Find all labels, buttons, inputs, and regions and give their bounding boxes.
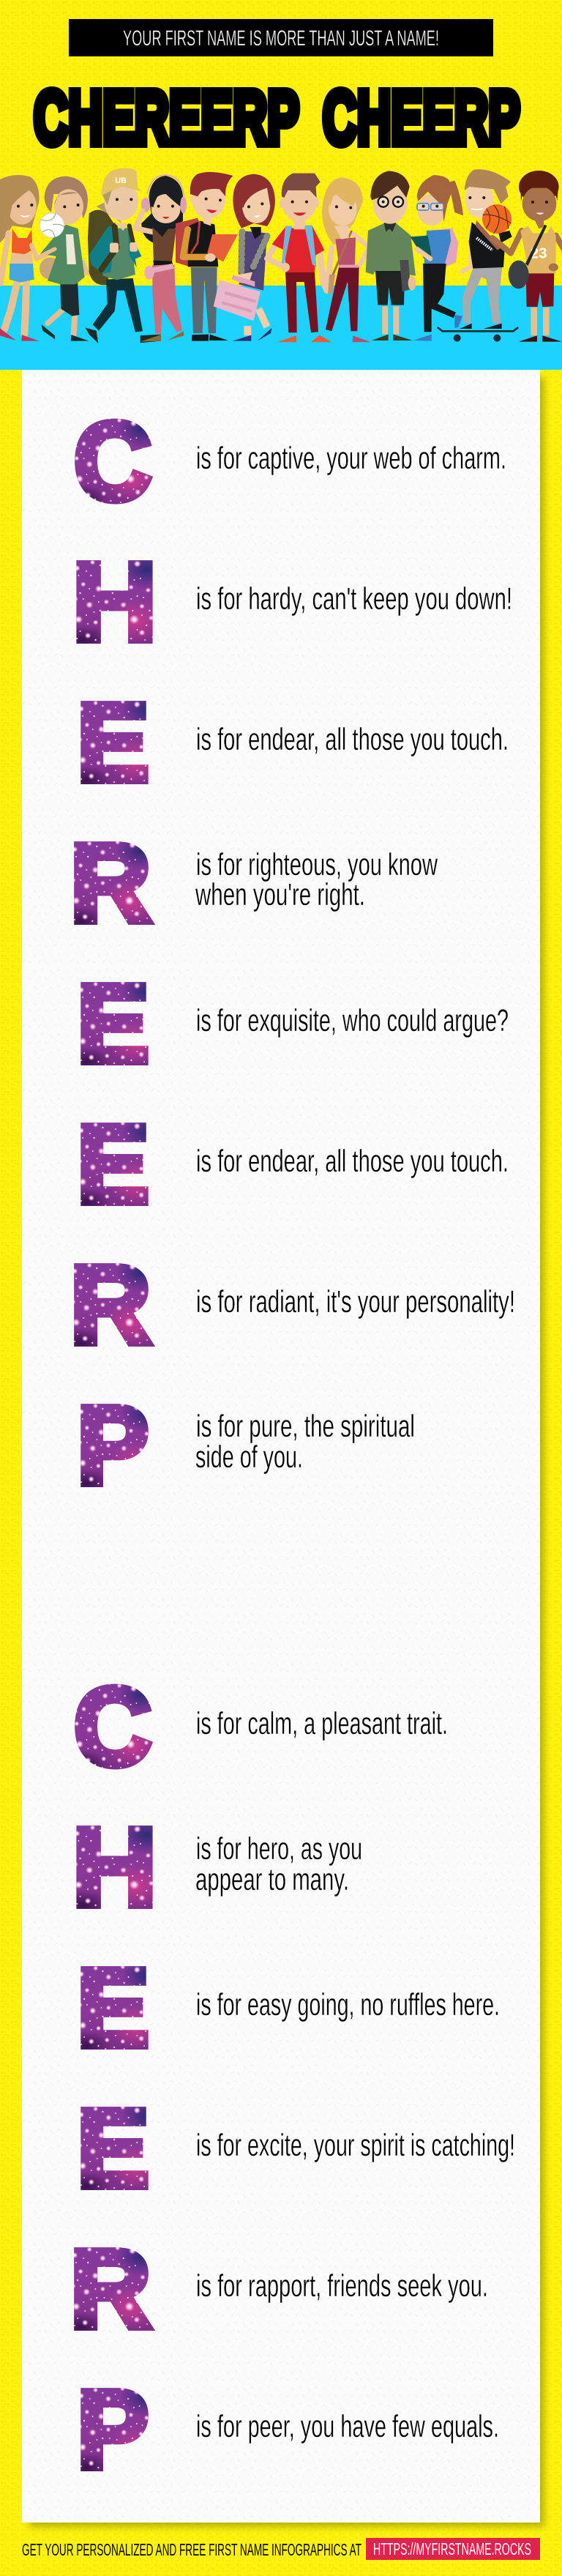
row: P pure — [77, 1383, 415, 1507]
row: E endear: E — [77, 680, 149, 804]
row: H hero — [72, 1806, 362, 1929]
row: E exquisite: E — [77, 961, 149, 1085]
row: R righteous: R — [70, 822, 151, 945]
row: R righteous: when you're right. — [195, 877, 365, 912]
row: H hero: H — [72, 1806, 157, 1929]
row: R radiant: R — [70, 1244, 151, 1367]
row: C calm: is for calm, a pleasant trait. — [196, 1706, 448, 1741]
row: C calm — [74, 1664, 448, 1788]
row: E excite: E — [77, 2086, 149, 2210]
person: boy in yellow jersey — [492, 171, 562, 342]
title — [34, 76, 520, 160]
row: P pure: is for pure, the spiritual — [196, 1409, 415, 1444]
person: boy with cap and backpack: UB — [115, 176, 127, 185]
person: boy in red shirt — [267, 174, 331, 342]
row: E easy going — [77, 1946, 500, 2069]
row: E exquisite — [77, 961, 509, 1085]
title: CHEREERP — [34, 76, 299, 160]
row: H hardy — [72, 540, 512, 663]
row: H hero: appear to many. — [195, 1862, 349, 1897]
row: H hardy: H — [72, 540, 157, 663]
panel: letter list — [22, 370, 544, 2527]
person: girl in orange top — [0, 175, 56, 341]
tagline banner — [69, 19, 493, 56]
row: E easy going: E — [77, 1946, 149, 2069]
row: R righteous — [70, 822, 438, 945]
row: R radiant — [70, 1244, 515, 1367]
person: boy in yellow jersey: 23 — [531, 245, 547, 261]
person: boy on skateboard with basketball — [438, 169, 517, 342]
row: P peer — [77, 2367, 499, 2491]
row: E excite — [77, 2086, 515, 2210]
row: E endear: E — [77, 1102, 149, 1226]
row: C calm: C — [74, 1664, 151, 1788]
row: R righteous: is for righteous, you know — [196, 847, 438, 882]
person: girl with headphones — [135, 175, 187, 342]
row: E endear — [77, 680, 509, 804]
row: C captive: C — [74, 399, 151, 523]
row: R rapport: R — [70, 2228, 151, 2351]
row: R rapport — [70, 2228, 488, 2351]
blue floor band — [0, 286, 562, 370]
row: H hero: is for hero, as you — [196, 1831, 362, 1866]
person: blonde girl — [322, 177, 371, 342]
person: girl with volleyball — [40, 176, 89, 341]
person: girl with pink bag — [214, 174, 275, 341]
row: E endear — [77, 1102, 509, 1226]
person: boy reading book — [176, 172, 238, 341]
row: P pure: side of you. — [195, 1440, 303, 1475]
person: girl with ponytail and tablet — [411, 175, 463, 341]
row: C captive — [74, 399, 506, 523]
row: P pure: P — [77, 1383, 149, 1507]
person: boy with cap and backpack — [86, 168, 161, 343]
row: P peer: P — [77, 2367, 149, 2491]
title: CHEERP — [323, 76, 520, 160]
illustration: group of students — [0, 168, 562, 343]
person: boy with glasses — [366, 171, 416, 340]
